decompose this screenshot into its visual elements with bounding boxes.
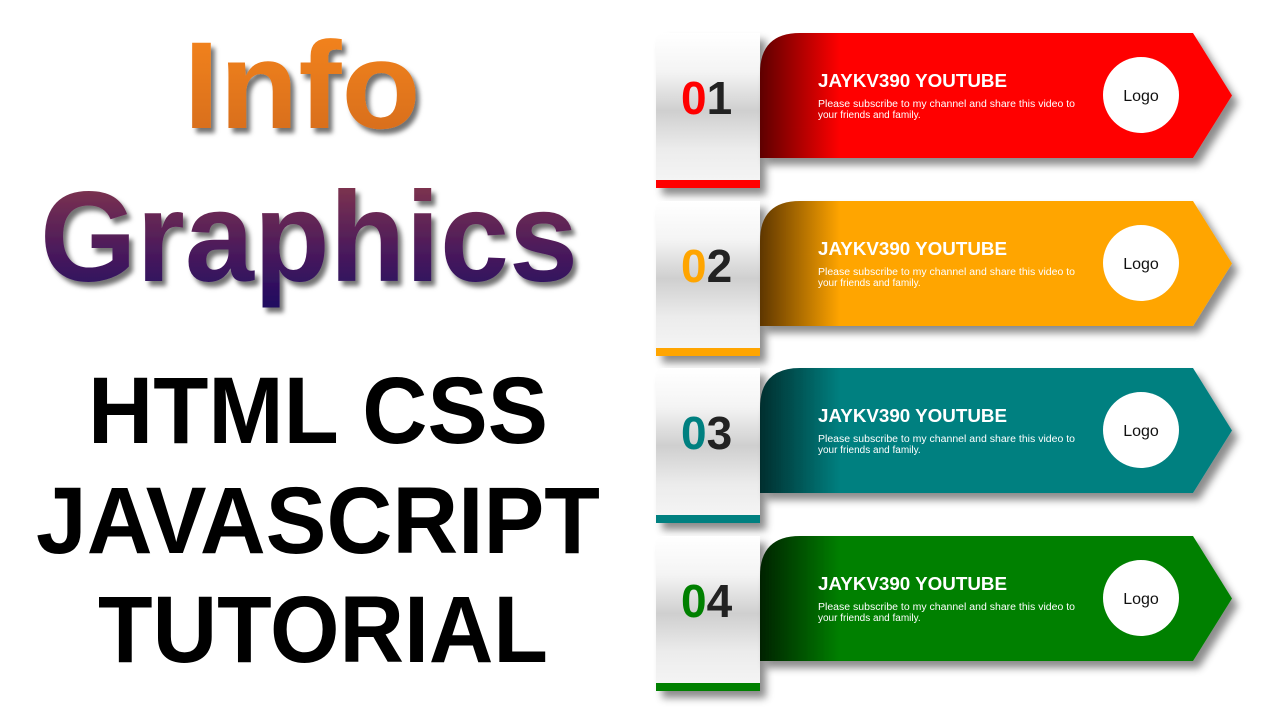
subtitle: HTML CSS: HTML CSS (88, 358, 548, 464)
number 02: 02 (681, 240, 732, 292)
title: Graphics: Graphics (40, 166, 578, 309)
number 01: 01 (681, 72, 732, 124)
subtitle: TUTORIAL: TUTORIAL (98, 577, 548, 683)
number 04: 04 (681, 575, 733, 627)
title: Info: Info (184, 17, 420, 155)
subtitle: JAVASCRIPT: JAVASCRIPT (36, 468, 600, 574)
item 02 orange (656, 201, 1232, 356)
number 03: 03 (681, 407, 732, 459)
item 01 red (656, 33, 1232, 188)
item 03 teal (656, 368, 1232, 523)
item 04 green (656, 536, 1232, 691)
